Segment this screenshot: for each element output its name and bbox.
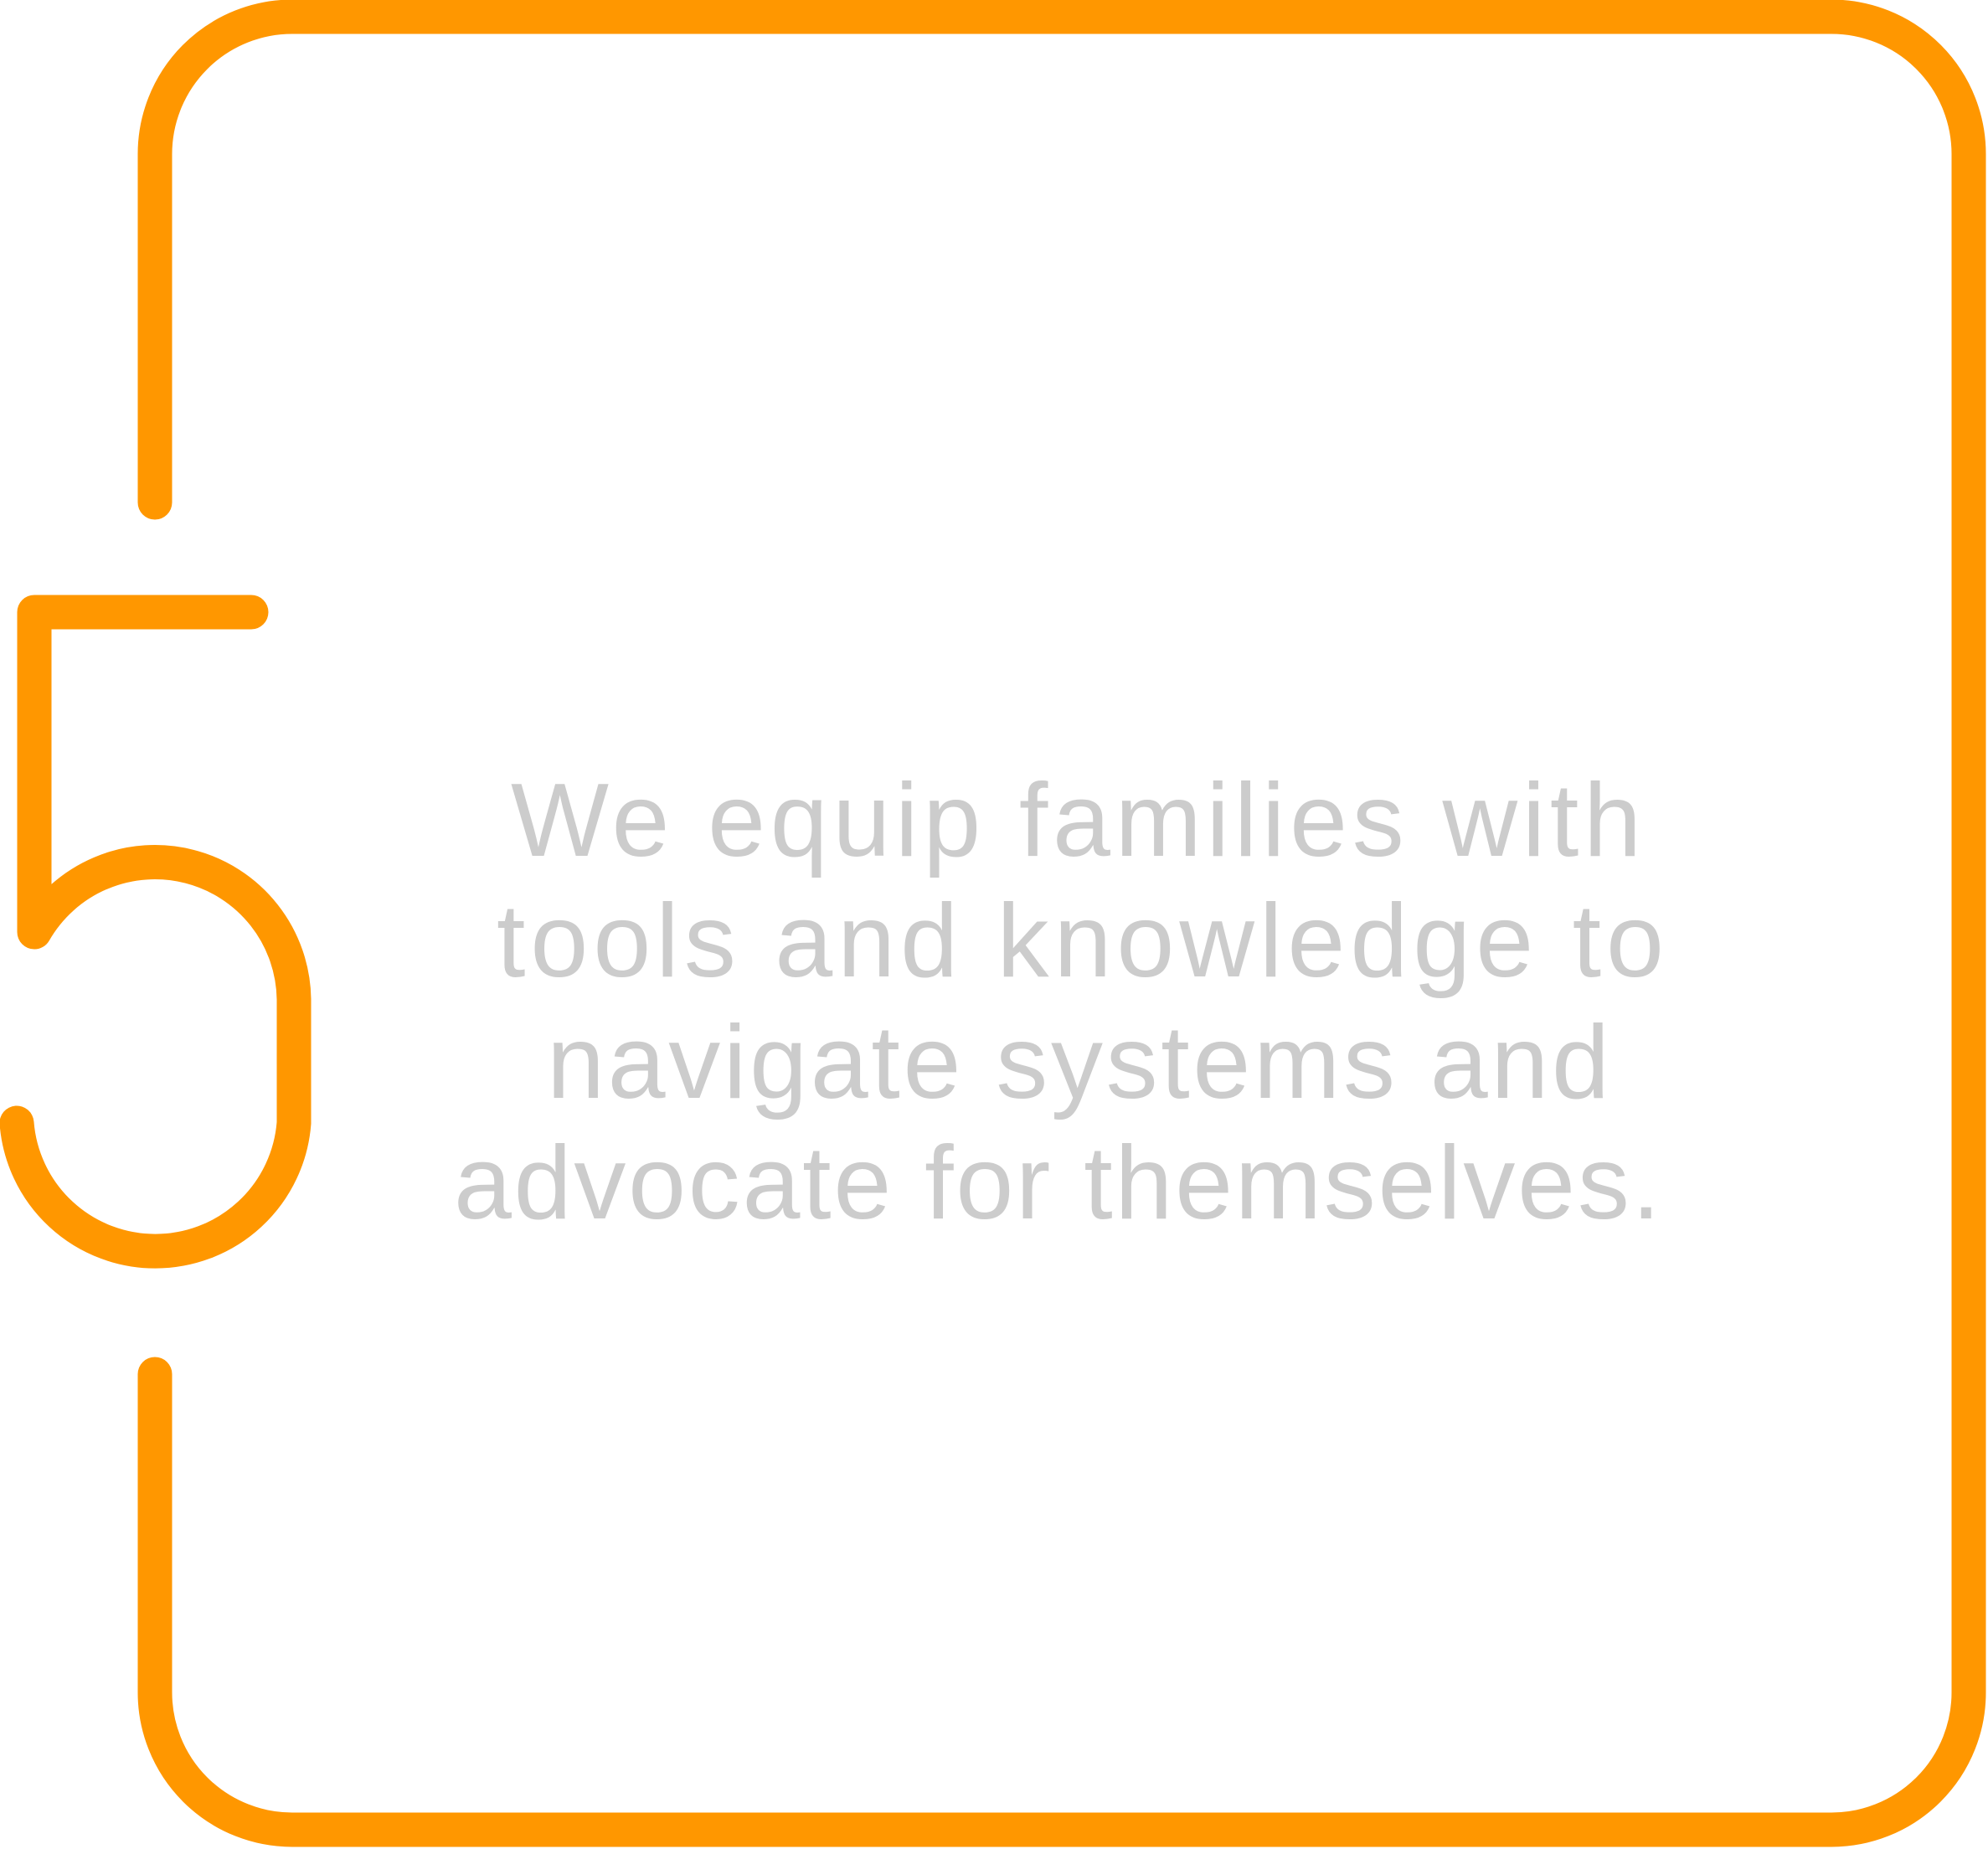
text block: description: We equip families with bbox=[511, 763, 1641, 878]
text block: description bbox=[454, 763, 1664, 1241]
text block: description: advocate for themselves. bbox=[454, 1125, 1661, 1241]
title: white text bbox=[635, 322, 1521, 663]
title: white text: EMPOWERING bbox=[635, 322, 1521, 462]
icon: numeral 5 bbox=[17, 612, 294, 1251]
title: white text: FAMILIES bbox=[795, 523, 1361, 663]
text block: description: tools and knowledge to bbox=[497, 883, 1664, 999]
text block: description: navigate systems and bbox=[547, 1005, 1609, 1120]
